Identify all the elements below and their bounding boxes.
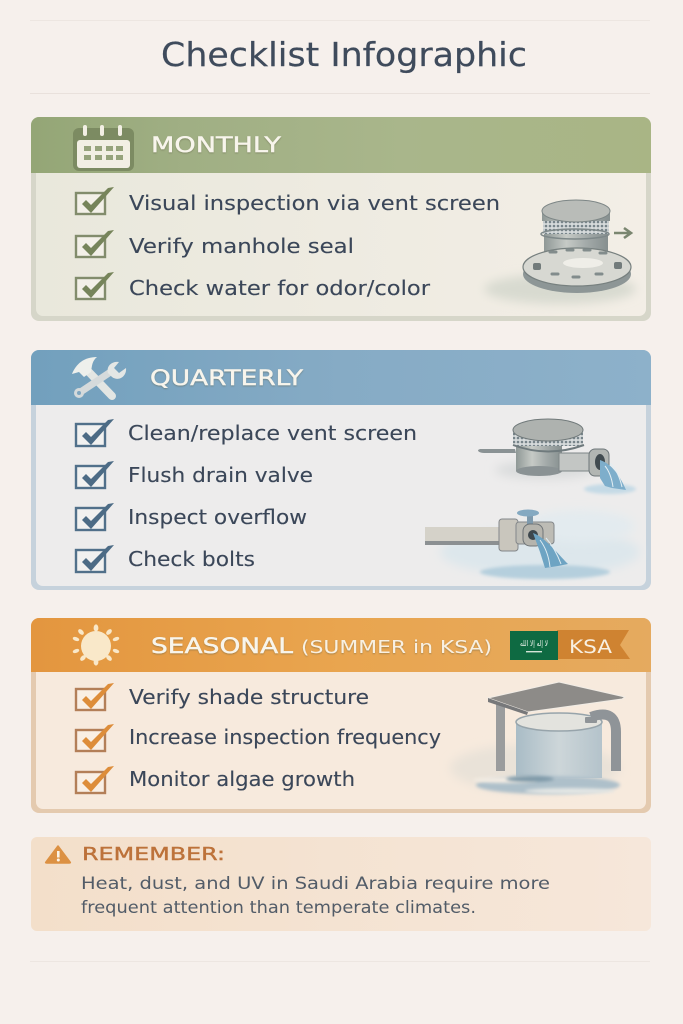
heading: monthly: MONTHLY (151, 133, 281, 157)
text: climate note: Heat, dust, and UV in Saudi Arabia require more (81, 874, 550, 894)
illustration: manhole with vent (484, 200, 636, 304)
badge: Saudi flag and KSA ribbon: لا إله إلا الله (520, 639, 548, 649)
text: climate note: frequent attention than temperate climates. (81, 898, 476, 918)
checklist: quarterly: Inspect overflow (128, 505, 307, 529)
panel: quarterly (31, 350, 651, 590)
badge: Saudi flag and KSA ribbon: KSA (569, 636, 612, 658)
checklist: seasonal: Monitor algae growth (129, 767, 355, 791)
checklist: quarterly: Flush drain valve (128, 463, 313, 487)
icon: hammer and wrench (72, 357, 126, 398)
checklist: quarterly (76, 419, 417, 572)
callout: remember (31, 837, 651, 931)
checklist: quarterly: Check bolts (128, 547, 255, 571)
text: climate note (81, 874, 550, 918)
heading: quarterly: QUARTERLY (150, 366, 303, 390)
heading: remember: REMEMBER: (82, 844, 225, 865)
badge: Saudi flag and KSA ribbon (510, 630, 630, 660)
illustration: shaded water tank (450, 682, 625, 794)
heading: seasonal: (SUMMER in KSA) (301, 637, 492, 658)
checklist: seasonal: Increase inspection frequency (129, 725, 441, 749)
checklist: monthly: Visual inspection via vent screen (129, 191, 500, 215)
panel: monthly (31, 117, 651, 321)
heading: seasonal: SEASONAL (151, 634, 293, 658)
checklist: monthly: Verify manhole seal (129, 234, 354, 258)
icon: sun (72, 624, 120, 666)
checklist: seasonal: Verify shade structure (129, 685, 369, 709)
checklist: monthly (76, 187, 500, 300)
icon: calendar (73, 125, 134, 171)
checklist: monthly: Check water for odor/color (129, 276, 431, 300)
illustration: vent with flowing drain (425, 419, 640, 579)
title: Checklist Infographic (161, 35, 527, 74)
panel: seasonal (31, 618, 651, 813)
checklist: quarterly: Clean/replace vent screen (128, 421, 417, 445)
heading: seasonal (151, 634, 492, 658)
icon: warning triangle (46, 846, 70, 863)
checklist: seasonal (76, 683, 441, 793)
